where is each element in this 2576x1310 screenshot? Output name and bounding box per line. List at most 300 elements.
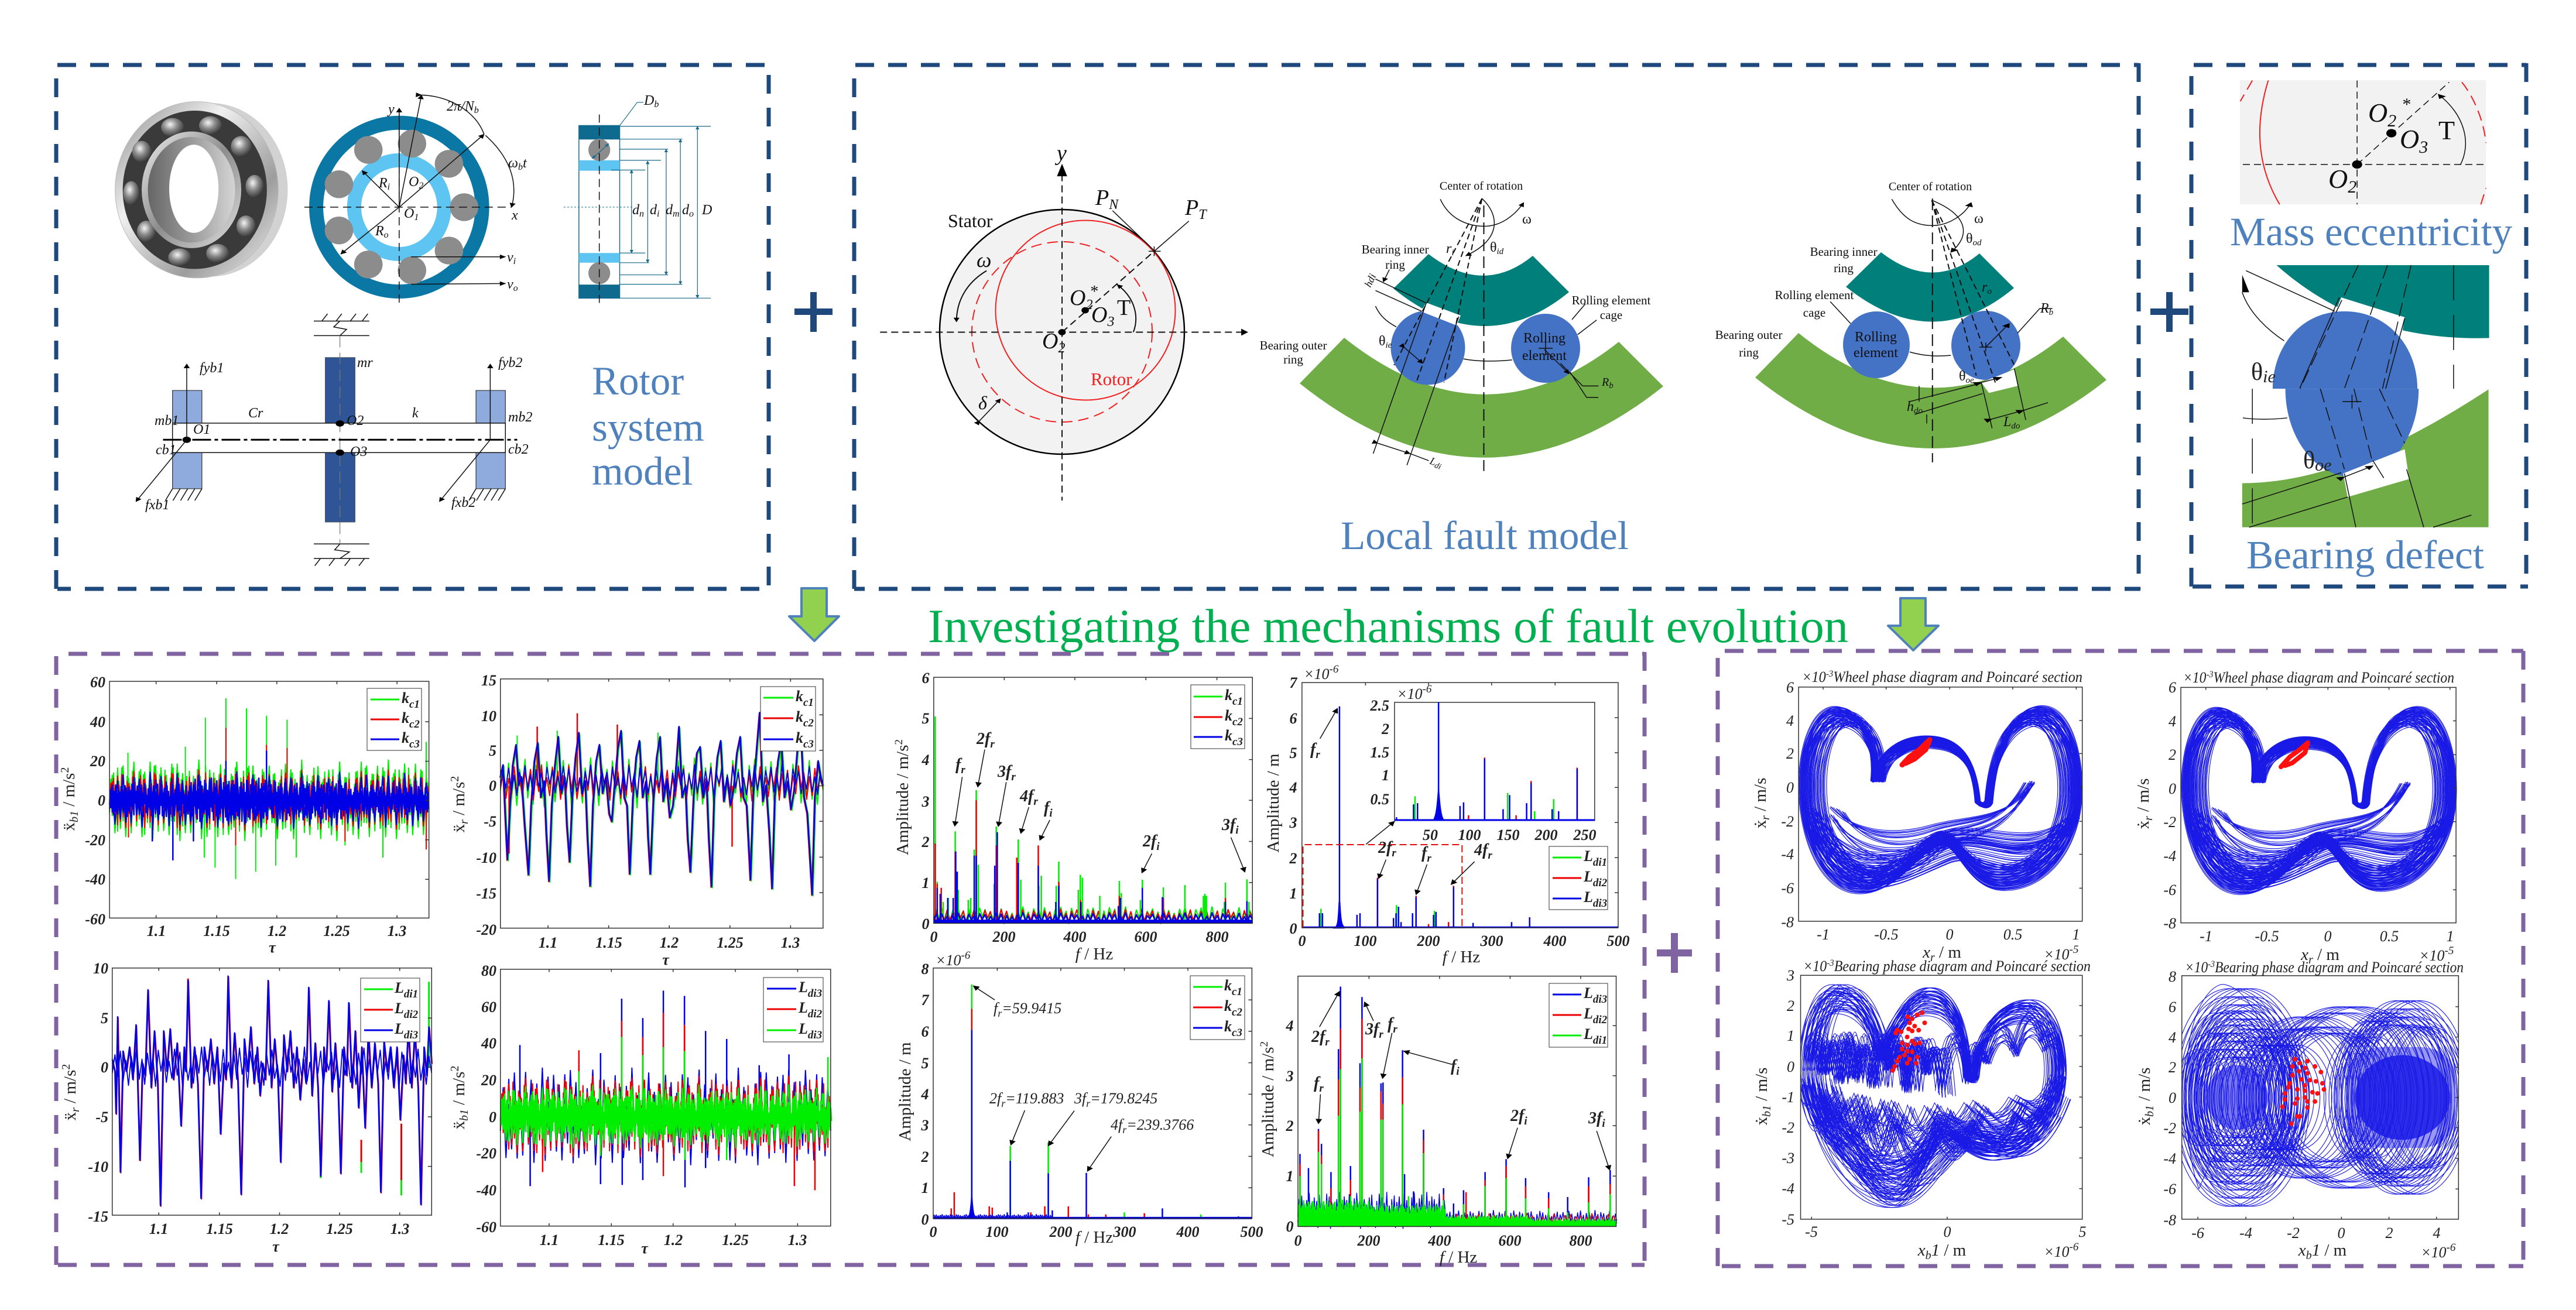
legend: [361, 978, 420, 1042]
chart: rotor acceleration time series L_di: r: [69, 1107, 82, 1112]
legend: c1: [803, 697, 814, 709]
outer ring fault bearing diagram: element: [1854, 345, 1898, 361]
chart: bearing acceleration time series L_di: 1.3: [788, 1232, 807, 1249]
bearing defect crop: [2242, 265, 2489, 527]
chart: wheel phase diagram 1: x: [1922, 943, 1930, 962]
chart: rotor acceleration time series k_c: τ: [662, 951, 670, 968]
heading: rotor system model: Rotor: [592, 359, 684, 403]
outer ring fault bearing diagram: [1560, 180, 2106, 462]
chart: wheel phase diagram 2: r: [2142, 816, 2155, 821]
bearing cross-section diagram: R: [379, 176, 388, 191]
legend: c1: [1232, 695, 1243, 708]
bearing cross-section diagram: 1: [414, 212, 419, 222]
chart: bearing acceleration time series k_c: 1.25: [323, 923, 350, 939]
chart: displacement spectrum L_di with inset: f: [1421, 844, 1427, 862]
chart: wheel phase diagram 2: ẋ: [2134, 821, 2153, 829]
chart: displacement spectrum k_c: 3: [920, 1117, 929, 1134]
bearing section dimension diagram: m: [673, 209, 680, 219]
chart: displacement spectrum L_di with inset: 1.5: [1370, 744, 1389, 761]
rotor shaft and bearing schematic: mr: [357, 355, 373, 371]
chart: rotor acceleration time series L_di: 1.15: [206, 1220, 233, 1237]
chart: acceleration spectrum L_di: Amplitude / m/s: [1259, 1047, 1277, 1157]
legend: di3: [1593, 993, 1607, 1006]
chart: bearing phase diagram 2: [2135, 959, 2469, 1262]
chart: displacement spectrum L_di with inset: 0: [1289, 920, 1297, 937]
legend: di3: [1593, 897, 1607, 910]
legend: L: [799, 999, 808, 1016]
chart: bearing acceleration time series L_di: b1: [458, 1109, 471, 1121]
mass eccentricity crop: O: [2400, 124, 2419, 154]
chart: rotor acceleration time series L_di: -5: [95, 1109, 108, 1126]
bearing section dimension diagram: i: [657, 209, 659, 219]
chart: bearing phase diagram 2: -2: [2287, 1225, 2300, 1242]
chart: acceleration spectrum k_c: f / Hz: [1075, 945, 1113, 963]
mass eccentricity crop: *: [2402, 95, 2410, 114]
chart: acceleration spectrum L_di: 3f: [1365, 1020, 1379, 1038]
inner ring fault bearing diagram: Center of rotation: [1440, 180, 1523, 193]
mass eccentricity crop: T: [2438, 115, 2455, 145]
chart: wheel phase diagram 2: -2: [2163, 814, 2176, 831]
chart: acceleration spectrum L_di: i: [1456, 1065, 1460, 1078]
chart: rotor acceleration time series L_di: ẍ: [61, 1112, 80, 1120]
legend: di3: [808, 1029, 822, 1041]
panel: rotor system model: [56, 65, 769, 589]
chart: bearing phase diagram 2: ẋ: [2135, 1117, 2154, 1125]
inner ring fault bearing diagram: ω: [1522, 212, 1532, 227]
legend: c2: [1232, 716, 1243, 728]
chart: bearing phase diagram 2: b: [2306, 1249, 2312, 1262]
chart: displacement spectrum k_c: 5: [922, 1055, 929, 1072]
rotor shaft and bearing schematic: cb1: [156, 443, 176, 458]
chart: acceleration spectrum k_c: 800: [1206, 928, 1228, 945]
chart: displacement spectrum L_di with inset: 300: [1480, 932, 1503, 949]
inner ring fault bearing diagram: di: [1433, 461, 1442, 472]
chart: displacement spectrum k_c: [896, 949, 1263, 1247]
chart: acceleration spectrum L_di: r: [1319, 1082, 1324, 1095]
chart: acceleration spectrum k_c: r: [990, 738, 995, 750]
stator and rotor eccentricity diagram: Rotor: [1091, 369, 1132, 389]
stator and rotor eccentricity diagram: 2: [1058, 341, 1065, 356]
inner ring fault bearing diagram: ring: [1283, 352, 1303, 366]
rotor shaft and bearing schematic: O2: [347, 413, 364, 428]
chart: bearing acceleration time series k_c: 0: [98, 792, 105, 809]
mass eccentricity crop: 2: [2348, 177, 2356, 197]
chart: rotor acceleration time series k_c: 0: [489, 777, 496, 794]
inner ring fault bearing diagram: ring: [1385, 258, 1405, 272]
heading: local fault model: Local fault model: [1341, 513, 1629, 558]
chart: displacement spectrum k_c: 1: [922, 1179, 929, 1196]
chart: wheel phase diagram 1: 0: [1946, 926, 1953, 943]
chart: wheel phase diagram 1: / m: [1935, 943, 1961, 962]
bearing cross-section diagram: b: [474, 105, 479, 115]
legend: k: [1225, 687, 1232, 704]
chart: acceleration spectrum L_di: 200: [1357, 1232, 1381, 1249]
icon: plus between plot panels: [1657, 933, 1692, 973]
outer ring fault bearing diagram: L: [2003, 414, 2011, 430]
chart: wheel phase diagram 1: r: [1930, 951, 1935, 964]
chart: bearing acceleration time series L_di: τ: [641, 1240, 649, 1257]
chart: acceleration spectrum L_di: r: [1393, 1023, 1397, 1035]
chart: acceleration spectrum L_di: f: [1314, 1074, 1319, 1092]
stator and rotor eccentricity diagram: *: [1090, 283, 1098, 301]
rotor shaft and bearing schematic: mb2: [508, 410, 532, 425]
chart: displacement spectrum L_di with inset: 200: [1417, 932, 1440, 949]
chart: displacement spectrum k_c: =59.9415: [1002, 1000, 1061, 1017]
chart: bearing phase diagram 1: -4: [1782, 1180, 1794, 1197]
legend: k: [1224, 977, 1232, 994]
chart: displacement spectrum k_c: 2: [920, 1148, 929, 1165]
legend: di1: [1593, 856, 1607, 869]
chart: bearing acceleration time series k_c: 40: [90, 714, 105, 731]
chart: bearing phase diagram 2: Bearing phase diagram and Poincaré section: [2215, 959, 2464, 976]
legend: [1549, 846, 1608, 910]
chart: displacement spectrum L_di with inset: 1: [1289, 885, 1297, 902]
legend: L: [1584, 889, 1593, 906]
chart: wheel phase diagram 1: 6: [1786, 679, 1794, 696]
bearing section dimension diagram: b: [654, 100, 659, 109]
outer ring fault bearing diagram: Bearing inner: [1810, 245, 1877, 259]
outer ring fault bearing diagram: do: [2011, 421, 2020, 431]
chart: wheel phase diagram 1: ×10: [2044, 946, 2070, 963]
rotor shaft and bearing schematic: fyb2: [498, 355, 522, 371]
chart: wheel phase diagram 2: -3: [2206, 670, 2214, 680]
chart: wheel phase diagram 1: 2: [1786, 745, 1794, 762]
chart: displacement spectrum L_di with inset: 150: [1496, 827, 1520, 843]
bearing cross-section diagram: v: [507, 277, 513, 292]
bearing cross-section diagram: b: [518, 162, 523, 172]
stator and rotor eccentricity diagram: T: [1117, 296, 1131, 320]
chart: wheel phase diagram 2: -0.5: [2255, 928, 2279, 945]
chart: bearing acceleration time series L_di: -60: [476, 1219, 496, 1236]
chart: acceleration spectrum L_di: 2: [1258, 1041, 1270, 1047]
chart: bearing acceleration time series k_c: 1.2: [268, 923, 286, 939]
chart: displacement spectrum k_c: =179.8245: [1090, 1090, 1157, 1107]
legend: di2: [808, 1008, 823, 1020]
chart: rotor acceleration time series L_di: 0: [101, 1059, 108, 1076]
chart: acceleration spectrum L_di: 400: [1427, 1232, 1451, 1249]
chart: acceleration spectrum k_c: 2f: [1143, 832, 1156, 851]
outer ring fault bearing diagram: od: [1973, 238, 1982, 248]
chart: wheel phase diagram 1: 1: [2073, 926, 2080, 943]
chart: displacement spectrum k_c: 7: [922, 992, 930, 1009]
outer ring fault bearing diagram: θ: [1966, 231, 1973, 246]
chart: acceleration spectrum L_di: 2f: [1311, 1028, 1325, 1046]
stator and rotor eccentricity diagram: P: [1185, 196, 1198, 220]
chart: bearing acceleration time series k_c: -60: [85, 911, 105, 928]
chart: rotor acceleration time series L_di: [60, 960, 432, 1255]
chart: wheel phase diagram 1: 4: [1786, 712, 1794, 729]
chart: displacement spectrum k_c: 400: [1176, 1223, 1199, 1240]
chart: displacement spectrum k_c: 6: [922, 1023, 929, 1040]
inner ring fault bearing diagram: r: [1446, 241, 1451, 256]
bearing section dimension diagram: d: [650, 203, 657, 218]
chart: wheel phase diagram 2: ×10: [2419, 947, 2445, 964]
inner ring fault bearing diagram: Bearing inner: [1362, 242, 1429, 256]
chart: acceleration spectrum k_c: 200: [992, 928, 1015, 945]
chart: displacement spectrum L_di with inset: 4f: [1474, 841, 1488, 859]
chart: wheel phase diagram 1: -2: [1781, 813, 1794, 830]
chart: acceleration spectrum L_di: [1258, 976, 1617, 1267]
chart: acceleration spectrum L_di: 2: [1286, 1117, 1294, 1134]
outer ring fault bearing diagram: r: [1982, 280, 1987, 295]
outer ring fault bearing diagram: do: [1914, 406, 1923, 416]
stator and rotor eccentricity diagram: Stator: [948, 210, 993, 231]
chart: bearing phase diagram 2: 6: [2169, 999, 2176, 1016]
chart: bearing phase diagram 1: -5: [1805, 1223, 1818, 1240]
chart: wheel phase diagram 1: [1751, 668, 2082, 964]
chart: bearing acceleration time series k_c: -40: [85, 871, 105, 888]
chart: rotor acceleration time series k_c: 1.15: [595, 934, 622, 951]
inner ring fault bearing diagram: i: [1451, 248, 1454, 258]
chart: wheel phase diagram 2: r: [2308, 954, 2313, 966]
chart: acceleration spectrum k_c: 2: [922, 834, 930, 851]
chart: wheel phase diagram 2: x: [2300, 945, 2308, 964]
chart: bearing phase diagram 2: 0: [2337, 1225, 2345, 1242]
chart: displacement spectrum k_c: r: [998, 1007, 1002, 1019]
rotor shaft and bearing schematic: O1: [193, 422, 210, 437]
chart: displacement spectrum L_di with inset: ×10: [1304, 666, 1330, 683]
chart: wheel phase diagram 2: 1: [2446, 928, 2454, 945]
chart: bearing phase diagram 2: x: [2298, 1241, 2306, 1260]
chart: acceleration spectrum k_c: r: [1011, 771, 1016, 783]
chart: displacement spectrum k_c: f: [994, 1000, 998, 1017]
chart: acceleration spectrum k_c: 3f: [1222, 816, 1235, 834]
heading: mass eccentricity: Mass eccentricity: [2230, 210, 2512, 254]
legend: L: [1584, 868, 1593, 885]
chart: rotor acceleration time series k_c: -10: [476, 849, 496, 866]
chart: wheel phase diagram 1: -3: [1826, 669, 1833, 679]
chart: wheel phase diagram 1: r: [1759, 815, 1772, 820]
chart: displacement spectrum L_di with inset: -6: [1330, 663, 1339, 675]
inner ring fault bearing diagram: L: [1429, 455, 1438, 468]
chart: bearing phase diagram 1: ×10: [2044, 1243, 2070, 1260]
chart: rotor acceleration time series L_di: / m/s: [61, 1070, 80, 1107]
bearing cross-section diagram: o: [384, 230, 389, 240]
chart: wheel phase diagram 2: -4: [2163, 848, 2176, 865]
chart: acceleration spectrum k_c: [893, 670, 1252, 963]
chart: displacement spectrum L_di with inset: 3: [1289, 814, 1297, 831]
bearing cross-section diagram: x: [511, 208, 518, 223]
bearing cross-section diagram: 2: [419, 181, 423, 191]
chart: wheel phase diagram 2: -6: [2163, 882, 2176, 899]
chart: displacement spectrum k_c: Amplitude / m: [896, 1042, 914, 1141]
chart: displacement spectrum k_c: 300: [1112, 1223, 1136, 1240]
chart: bearing phase diagram 1: -5: [1782, 1211, 1794, 1228]
chart: displacement spectrum L_di with inset: Amplitude / m: [1264, 753, 1283, 853]
chart: bearing acceleration time series L_di: 1.15: [598, 1232, 625, 1249]
chart: acceleration spectrum L_di: 4: [1286, 1017, 1294, 1034]
chart: rotor acceleration time series k_c: / m/s: [450, 782, 468, 819]
chart: displacement spectrum k_c: ×10: [936, 952, 961, 969]
legend: c2: [1232, 1006, 1242, 1018]
legend: [761, 687, 816, 751]
chart: wheel phase diagram 2: 0: [2324, 928, 2331, 945]
chart: wheel phase diagram 2: 6: [2169, 679, 2176, 696]
arrow: down to time and frequency plots: [789, 588, 839, 641]
inner ring fault bearing diagram: [1260, 180, 1663, 472]
chart: rotor acceleration time series k_c: -20: [476, 921, 496, 938]
chart: bearing acceleration time series L_di: 60: [481, 999, 496, 1016]
chart: rotor acceleration time series L_di: -10: [88, 1158, 108, 1175]
legend: c3: [803, 738, 814, 750]
chart: bearing acceleration time series k_c: b1: [68, 811, 81, 822]
inner ring fault bearing diagram: Bearing outer: [1260, 338, 1327, 352]
outer ring fault bearing diagram: oe: [1966, 376, 1974, 385]
outer ring fault bearing diagram: h: [1907, 399, 1914, 414]
legend: [1190, 976, 1245, 1040]
chart: bearing acceleration time series k_c: 1.1: [147, 923, 166, 939]
chart: bearing phase diagram 2: 4: [2433, 1225, 2440, 1242]
chart: displacement spectrum L_di with inset: -6: [1423, 683, 1432, 695]
chart: bearing acceleration time series k_c: 2: [59, 767, 71, 773]
chart: acceleration spectrum L_di: 0: [1286, 1218, 1294, 1235]
stator and rotor eccentricity diagram: 2: [1085, 297, 1092, 313]
chart: displacement spectrum L_di with inset: 2: [1381, 721, 1389, 738]
bearing cross-section diagram: 2π/N: [447, 99, 474, 114]
icon: plus between panels: [2150, 292, 2188, 332]
panel: local fault model: [854, 63, 2140, 589]
chart: wheel phase diagram 2: -1: [2200, 928, 2212, 945]
chart: bearing acceleration time series L_di: 20: [481, 1072, 496, 1089]
legend: [367, 688, 422, 750]
chart: displacement spectrum L_di with inset: 400: [1543, 932, 1567, 949]
chart: displacement spectrum L_di with inset: r: [1392, 847, 1396, 859]
chart: bearing phase diagram 2: b1: [2143, 1105, 2156, 1117]
chart: acceleration spectrum k_c: 2f: [977, 730, 990, 748]
chart: displacement spectrum k_c: 0: [930, 1223, 937, 1240]
chart: rotor acceleration time series k_c: [448, 672, 824, 968]
chart: acceleration spectrum L_di: 0: [1294, 1232, 1302, 1249]
legend: [1549, 983, 1608, 1047]
chart: rotor acceleration time series k_c: -5: [484, 813, 496, 830]
chart: rotor acceleration time series L_di: 1.2: [270, 1220, 289, 1237]
chart: bearing phase diagram 1: [1752, 958, 2091, 1262]
chart: bearing acceleration time series L_di: / m/s: [450, 1072, 468, 1109]
legend: k: [402, 729, 409, 746]
panel: phase diagrams and Poincare sections: [1718, 651, 2523, 1266]
chart: acceleration spectrum k_c: 2: [893, 739, 905, 745]
chart: bearing phase diagram 1: / m: [1944, 1241, 1966, 1260]
panel: time and frequency domain plots: [56, 652, 1645, 1267]
chart: bearing phase diagram 2: -4: [2163, 1150, 2176, 1167]
chart: displacement spectrum k_c: 8: [922, 961, 929, 978]
chart: rotor acceleration time series L_di: 1.1: [149, 1220, 168, 1237]
chart: displacement spectrum k_c: 4f: [1111, 1116, 1122, 1133]
chart: acceleration spectrum k_c: 400: [1063, 928, 1087, 945]
chart: rotor acceleration time series L_di: τ: [272, 1238, 280, 1255]
legend: c1: [409, 698, 420, 711]
chart: displacement spectrum L_di with inset: ×10: [1397, 685, 1423, 702]
chart: wheel phase diagram 2: -8: [2163, 915, 2176, 932]
chart: bearing acceleration time series L_di: -40: [476, 1182, 496, 1199]
rotor shaft and bearing schematic: fxb1: [145, 498, 169, 513]
chart: acceleration spectrum k_c: i: [1235, 824, 1239, 836]
chart: acceleration spectrum k_c: 3f: [998, 763, 1011, 781]
chart: bearing acceleration time series L_di: 0: [489, 1109, 496, 1126]
chart: acceleration spectrum k_c: 4: [922, 752, 930, 769]
chart: wheel phase diagram 1: Wheel phase diagram and Poincaré section: [1833, 668, 2082, 685]
stator and rotor eccentricity diagram: O: [1070, 286, 1085, 310]
chart: displacement spectrum L_di with inset: 100: [1354, 932, 1377, 949]
chart: wheel phase diagram 2: 0: [2169, 780, 2176, 797]
legend: di2: [404, 1009, 419, 1021]
chart: acceleration spectrum k_c: f: [1044, 799, 1049, 817]
mass eccentricity crop: O: [2328, 164, 2348, 194]
chart: acceleration spectrum L_di: 3: [1286, 1068, 1294, 1085]
rotor shaft and bearing schematic: mb1: [155, 413, 179, 428]
chart: rotor acceleration time series k_c: 5: [489, 742, 496, 759]
bearing cross-section diagram: i: [513, 256, 516, 266]
chart: bearing phase diagram 2: ×10: [2421, 1244, 2447, 1261]
chart: acceleration spectrum k_c: r: [961, 764, 965, 776]
chart: rotor acceleration time series k_c: r: [458, 819, 471, 824]
chart: displacement spectrum L_di with inset: 6: [1289, 710, 1297, 727]
chart: bearing phase diagram 2: -3: [2208, 959, 2215, 969]
chart: acceleration spectrum L_di: f: [1451, 1057, 1456, 1075]
chart: acceleration spectrum L_di: 1: [1286, 1168, 1294, 1185]
chart: bearing phase diagram 1: 0: [1944, 1223, 1951, 1240]
inner ring fault bearing diagram: R: [1602, 376, 1609, 389]
rotor shaft and bearing schematic: k: [412, 406, 419, 421]
chart: bearing phase diagram 2: / m/s: [2135, 1068, 2154, 1105]
chart: wheel phase diagram 1: -4: [1781, 846, 1794, 863]
legend: k: [796, 688, 803, 705]
chart: displacement spectrum k_c: r: [1122, 1124, 1127, 1136]
chart: wheel phase diagram 1: -0.5: [1874, 926, 1899, 943]
outer ring fault bearing diagram: Rolling element: [1775, 288, 1854, 302]
chart: displacement spectrum L_di with inset: 250: [1573, 827, 1596, 843]
legend: k: [796, 708, 803, 725]
chart: wheel phase diagram 2: / m/s: [2134, 779, 2153, 816]
legend: L: [1584, 1026, 1593, 1042]
legend: L: [799, 979, 808, 996]
chart: bearing phase diagram 1: 1: [1787, 1027, 1794, 1044]
bearing section dimension diagram: d: [666, 203, 673, 218]
bearing cross-section diagram: t: [523, 156, 527, 171]
chart: bearing phase diagram 2: -4: [2239, 1225, 2252, 1242]
chart: displacement spectrum L_di with inset: 500: [1606, 932, 1630, 949]
legend: [763, 978, 823, 1042]
chart: bearing phase diagram 2: ×10: [2185, 959, 2211, 976]
chart: bearing phase diagram 2: 8: [2169, 968, 2176, 985]
chart: displacement spectrum L_di with inset: 100: [1458, 827, 1481, 843]
chart: displacement spectrum L_di with inset: 5: [1289, 745, 1297, 762]
outer ring fault bearing diagram: Rolling: [1855, 330, 1897, 345]
chart: rotor acceleration time series k_c: 10: [481, 708, 496, 725]
chart: acceleration spectrum L_di: r: [1325, 1036, 1330, 1048]
chart: bearing acceleration time series k_c: 1.3: [388, 923, 406, 939]
outer ring fault bearing diagram: o: [1987, 287, 1992, 296]
chart: bearing acceleration time series k_c: τ: [269, 939, 276, 956]
chart: acceleration spectrum k_c: 1: [922, 875, 930, 891]
legend: L: [1584, 848, 1593, 865]
rotor shaft and bearing schematic: Cr: [248, 406, 263, 421]
stator and rotor eccentricity diagram: N: [1108, 197, 1119, 212]
chart: displacement spectrum L_di with inset: 0: [1299, 932, 1306, 949]
chart: bearing phase diagram 1: b: [1926, 1249, 1931, 1262]
chart: bearing acceleration time series L_di: [448, 962, 831, 1257]
legend: c2: [803, 717, 814, 729]
chart: displacement spectrum k_c: 3f: [1074, 1090, 1086, 1107]
chart: displacement spectrum L_di with inset: 2f: [1378, 839, 1392, 857]
bearing section dimension diagram: n: [639, 209, 644, 219]
chart: displacement spectrum L_di with inset: 200: [1534, 827, 1557, 843]
legend: di1: [404, 988, 418, 1000]
chart: displacement spectrum k_c: 0: [922, 1211, 929, 1228]
chart: wheel phase diagram 1: -5: [2070, 944, 2078, 956]
mass eccentricity crop: [2240, 80, 2486, 204]
inner ring fault bearing diagram: Rolling: [1523, 331, 1566, 346]
